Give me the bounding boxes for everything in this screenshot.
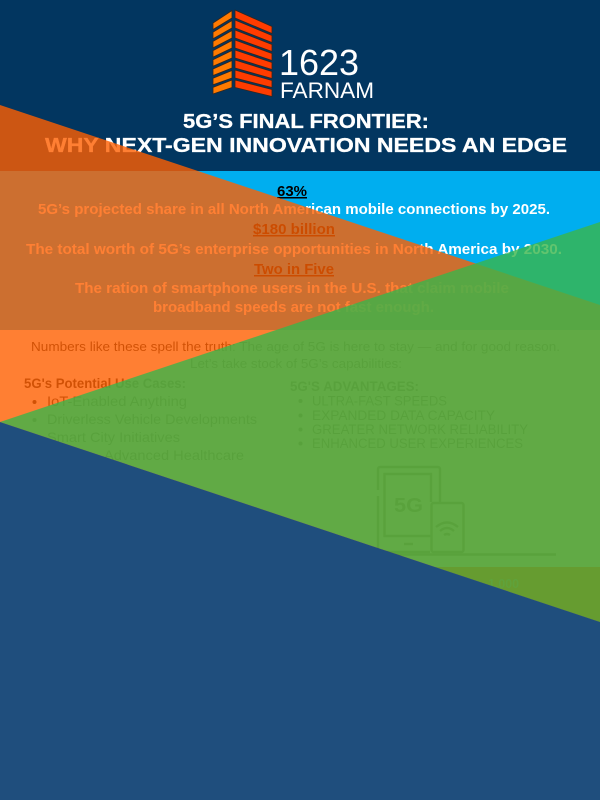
list heading: 5G's Potential Use Cases: (24, 375, 186, 391)
title (45, 111, 567, 157)
footer strip tint (435, 567, 600, 622)
list: potential use cases: Driverless Vehicle Developments (47, 411, 257, 427)
intro line one: Numbers like these spell the truth: The age of 5G is here to stay — and for good reason. (31, 339, 560, 354)
stat: two in five: Two in Five (254, 261, 334, 278)
overlay: green translucent triangle (0, 222, 600, 622)
stat: $180 billion: $180 billion (253, 221, 335, 238)
panel: cyan statistics background (0, 171, 600, 330)
list: potential use cases: Advanced Healthcare (104, 447, 244, 463)
icon: building (213, 10, 272, 96)
title line one: 5G’S FINAL FRONTIER: (183, 111, 429, 133)
logo number: 1623 (279, 42, 359, 83)
statistics text block (26, 183, 562, 316)
panel: navy header background (0, 0, 600, 171)
title line two: WHY NEXT-GEN INNOVATION NEEDS AN EDGE (45, 135, 567, 157)
stat description: enterprise opportunities: The total worth of 5G’s enterprise opportunities in North America by 2030. (26, 241, 562, 258)
list: potential use cases: IoT-Enabled Anything (47, 393, 187, 409)
icon: 5G tablet and phone (377, 467, 556, 554)
overlay: dark blue triangle (0, 422, 600, 800)
stat description continued: broadband speeds are not fast enough. (153, 299, 434, 316)
intro line two: Let’s take stock of 5G’s capabilities: (190, 356, 402, 371)
intro paragraph (31, 339, 560, 371)
logo wordmark: FARNAM (280, 78, 374, 103)
list: advantages: EXPANDED DATA CAPACITY (312, 408, 495, 423)
list: potential use cases: Smart City Initiatives (47, 429, 180, 445)
footer number: 1,000 (488, 576, 519, 591)
stat description: mobile connections: 5G’s projected share in all North American mobile connections by 2025. (38, 201, 550, 218)
stat: 63%: 63% (277, 183, 307, 200)
panel: white body background (0, 330, 600, 800)
list: advantages (290, 379, 528, 451)
icon label: 5G: 5G (394, 495, 423, 517)
list: potential use cases (24, 375, 257, 463)
list: advantages: GREATER NETWORK RELIABILITY (312, 422, 528, 437)
stat description: smartphone users: The ration of smartphone users in the U.S. that claim mobile (75, 280, 509, 297)
logo: 1623 Farnam (213, 10, 374, 103)
list heading: 5G'S ADVANTAGES: (290, 379, 419, 394)
list: advantages: ENHANCED USER EXPERIENCES (312, 436, 523, 451)
list: advantages: ULTRA-FAST SPEEDS (312, 394, 447, 408)
